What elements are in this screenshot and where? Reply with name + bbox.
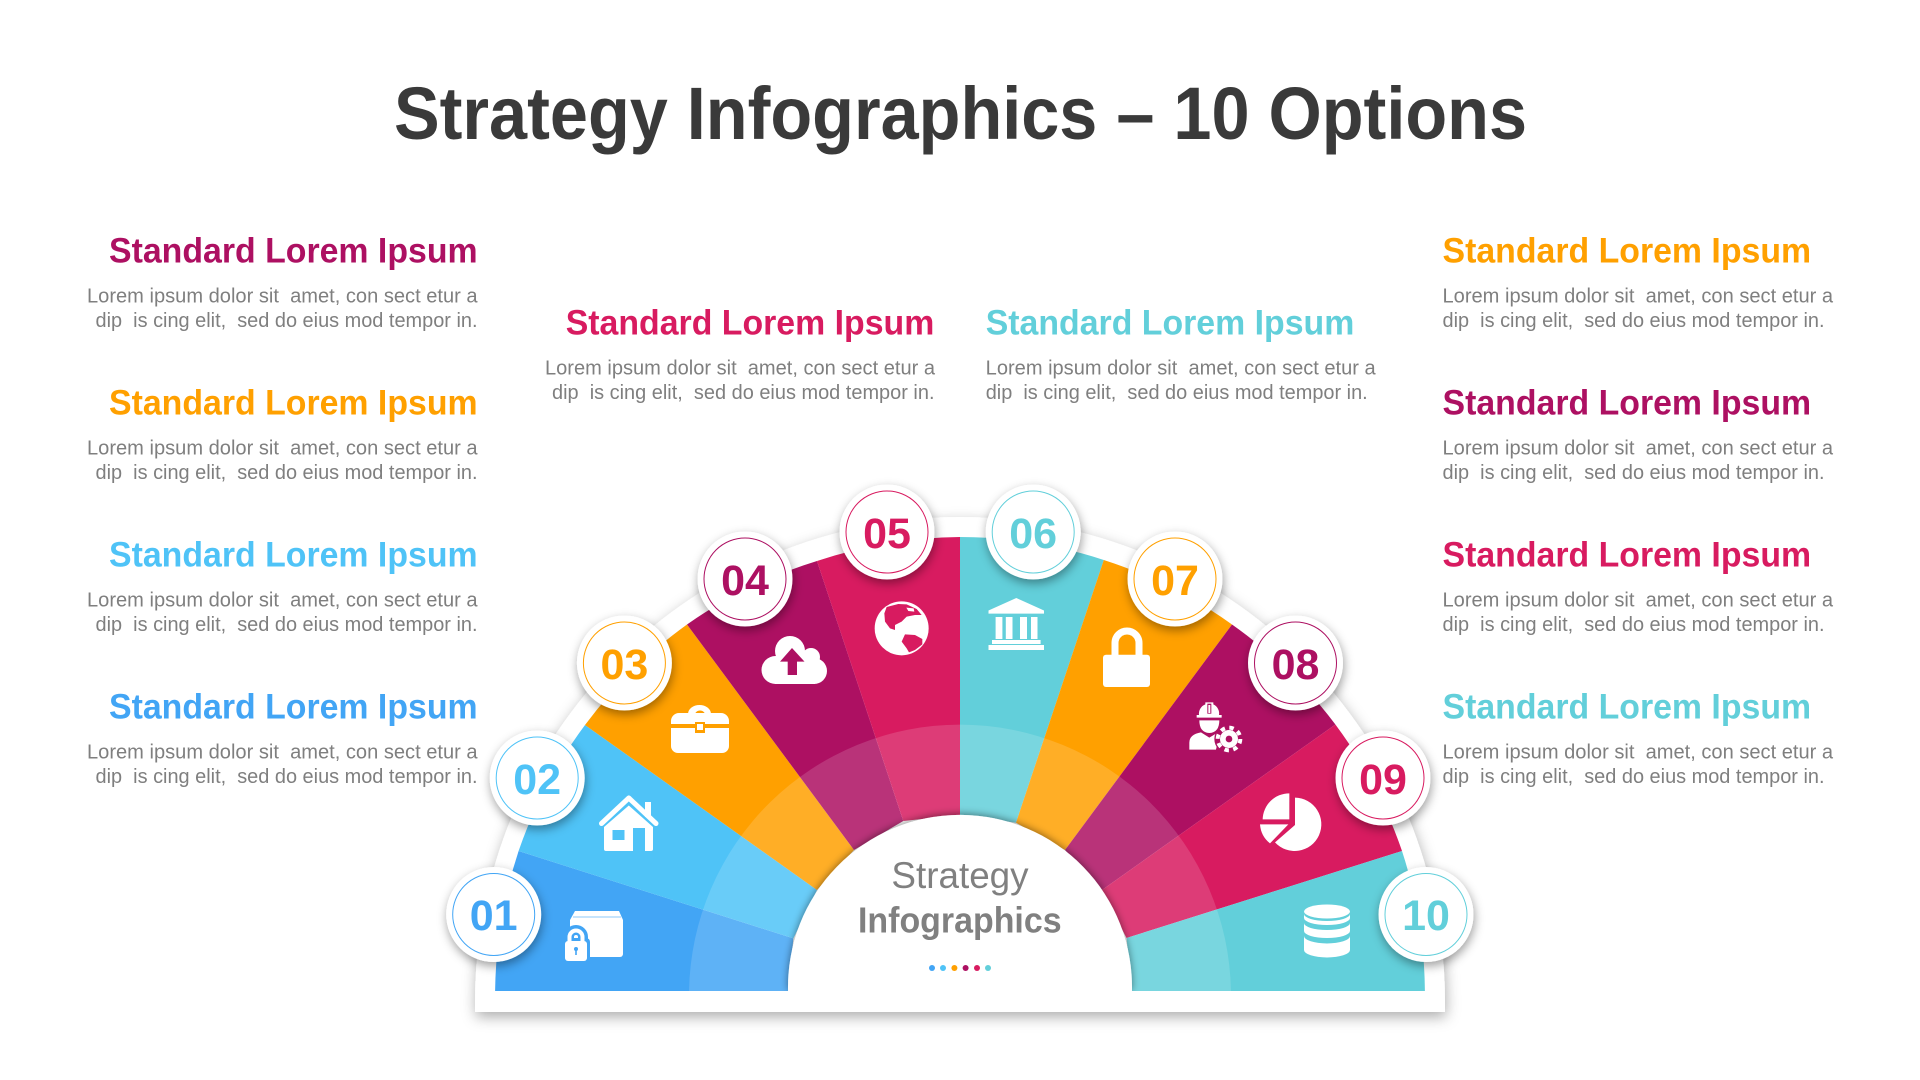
text block: right column item 3: Lorem ipsum dolor sit amet, con sect etur a [1442, 590, 1834, 612]
text block: left column item 3: dip is cing elit, sed do eius mod tempor in. [96, 614, 478, 636]
text block: left column item 2: Lorem ipsum dolor sit amet, con sect etur a [87, 438, 478, 460]
number badge 10 [1378, 867, 1474, 962]
text block: middle left item: Standard Lorem Ipsum [566, 304, 934, 342]
text block: right column item 4: dip is cing elit, sed do eius mod tempor in. [1442, 766, 1824, 788]
segment 03 [585, 624, 854, 890]
text block: left column item 1 [87, 232, 478, 332]
text block: middle right item: Standard Lorem Ipsum [986, 304, 1354, 342]
segment 04 [687, 561, 903, 850]
text block: right column item 4: Standard Lorem Ipsum [1442, 688, 1811, 726]
text block: left column item 4: Lorem ipsum dolor sit amet, con sect etur a [87, 742, 478, 764]
text block: left column item 2: dip is cing elit, sed do eius mod tempor in. [96, 462, 478, 484]
segment 09 [1102, 724, 1402, 938]
number badge 09 [1336, 730, 1430, 826]
text block: middle left item: Lorem ipsum dolor sit amet, con sect etur a [545, 358, 936, 380]
number badge 01: 01 [470, 892, 518, 940]
text block: right column item 1: Lorem ipsum dolor sit amet, con sect etur a [1442, 286, 1834, 308]
icon: toolbox [671, 705, 729, 753]
icon: globe [875, 601, 929, 655]
text block: middle right item [986, 304, 1377, 404]
text block: middle right item: Lorem ipsum dolor sit amet, con sect etur a [986, 358, 1377, 380]
number badge 03 [577, 616, 672, 710]
text block: left column item 1: dip is cing elit, sed do eius mod tempor in. [96, 310, 478, 332]
panel: centre hub [788, 815, 1132, 991]
number badge 08 [1248, 616, 1343, 710]
number badge 06 [986, 484, 1081, 580]
text block: middle left item [545, 304, 936, 404]
icon: bank building [988, 598, 1044, 650]
segment 10 [1126, 851, 1425, 991]
text block: left column item 2: Standard Lorem Ipsum [109, 384, 478, 422]
text block: right column item 3: Standard Lorem Ipsum [1442, 536, 1811, 574]
chart: semicircular fan of ten segments [495, 537, 1425, 991]
text block: right column item 1: Standard Lorem Ipsum [1442, 232, 1811, 270]
number badge 04 [698, 532, 792, 626]
icon: database [1304, 904, 1350, 958]
segment 01 [495, 851, 793, 991]
text block: left column item 3 [87, 536, 478, 636]
text block: right column item 2: dip is cing elit, sed do eius mod tempor in. [1442, 462, 1824, 484]
number badge 10: 10 [1402, 892, 1450, 940]
number badge 03: 03 [600, 641, 648, 689]
number badge 01 [446, 867, 541, 962]
icon: box with padlock [562, 911, 623, 964]
icon: pie chart [1260, 793, 1321, 851]
text block: left column item 3: Standard Lorem Ipsum [109, 536, 478, 574]
panel: white semicircle backing plate [475, 517, 1445, 1012]
text block: right column item 2: Lorem ipsum dolor sit amet, con sect etur a [1442, 438, 1834, 460]
text block: left column item 4: Standard Lorem Ipsum [109, 688, 478, 726]
segment 08 [1065, 624, 1335, 890]
icon: house [602, 798, 656, 851]
number badge 05: 05 [863, 510, 911, 558]
segment 02 [519, 725, 817, 938]
centre dots [929, 965, 991, 971]
text block: right column item 1 [1442, 232, 1834, 332]
segment 07 [1016, 560, 1232, 850]
number badge 07 [1128, 532, 1222, 626]
text block: left column item 4 [87, 688, 478, 788]
text block: right column item 2 [1442, 384, 1834, 484]
text block: left column item 4: dip is cing elit, sed do eius mod tempor in. [96, 766, 478, 788]
icon: worker with gear [1189, 702, 1244, 754]
icon: padlock [1103, 631, 1150, 687]
text block: right column item 4 [1442, 688, 1834, 788]
number badge 05 [840, 484, 934, 580]
text block: right column item 2: Standard Lorem Ipsum [1442, 384, 1811, 422]
number badge 02 [490, 730, 585, 826]
icon: cloud upload [762, 636, 827, 684]
text block: middle right item: dip is cing elit, sed do eius mod tempor in. [986, 382, 1368, 404]
number badge 09: 09 [1359, 756, 1407, 804]
segment 05 [817, 537, 960, 821]
text block: left column item 3: Lorem ipsum dolor sit amet, con sect etur a [87, 590, 478, 612]
centre label: Infographics [858, 900, 1062, 940]
text block: left column item 1: Standard Lorem Ipsum [109, 232, 478, 270]
number badge 07: 07 [1151, 557, 1199, 605]
number badge 08: 08 [1272, 641, 1319, 689]
text block: left column item 2 [87, 384, 478, 484]
translucent inner ring [689, 725, 1231, 991]
number badge 06: 06 [1009, 510, 1057, 558]
number badge 02: 02 [513, 756, 561, 804]
centre label: Strategy [891, 855, 1029, 896]
title: Strategy Infographics – 10 Options [394, 72, 1527, 155]
text block: right column item 3: dip is cing elit, sed do eius mod tempor in. [1442, 614, 1824, 636]
text block: right column item 3 [1442, 536, 1834, 636]
number badge 04: 04 [721, 557, 769, 605]
text block: right column item 1: dip is cing elit, sed do eius mod tempor in. [1442, 310, 1824, 332]
text block: middle left item: dip is cing elit, sed do eius mod tempor in. [552, 382, 934, 404]
text block: left column item 1: Lorem ipsum dolor sit amet, con sect etur a [87, 286, 478, 308]
centre label [858, 855, 1062, 940]
segment 06 [960, 537, 1104, 823]
text block: right column item 4: Lorem ipsum dolor sit amet, con sect etur a [1442, 742, 1834, 764]
